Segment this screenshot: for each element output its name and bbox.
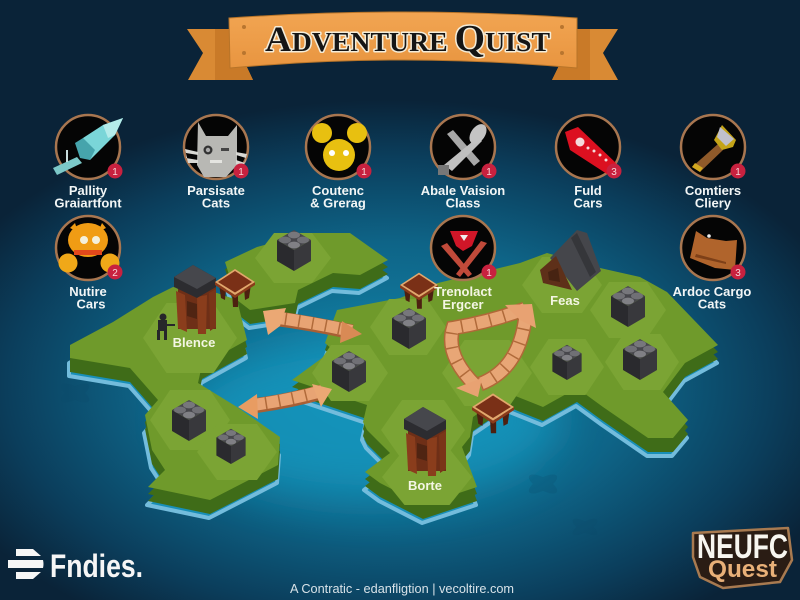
label: Comtiers Cliery: Cliery bbox=[695, 196, 732, 210]
tower: north-west bbox=[174, 265, 216, 334]
label: Parsisate Cats: Parsisate bbox=[187, 183, 245, 198]
label: Nutire Cars: Cars bbox=[77, 296, 105, 312]
hut bbox=[540, 230, 601, 291]
map islands bbox=[69, 233, 718, 523]
icon: crossed tools bbox=[431, 115, 496, 179]
label: Comtiers Cliery: Comtiers bbox=[685, 183, 741, 198]
banner: left tail bbox=[187, 29, 253, 80]
icon: red crossed rockets bbox=[431, 216, 496, 280]
storage cubes bbox=[172, 230, 657, 464]
label: Parsisate Cats: Cats bbox=[202, 196, 230, 210]
footer credit: A Contratic - edanfligtion | vecoltire.com bbox=[290, 582, 514, 596]
corner badge: NEUFC Quest: Quest bbox=[708, 556, 777, 583]
icon: silver mask: 1 bbox=[238, 167, 244, 178]
icon: crystal syringe bbox=[53, 115, 123, 179]
character bbox=[157, 314, 175, 340]
label: Pallity Graiartfont: Graiartfont bbox=[54, 196, 122, 210]
icon: wooden chest bbox=[681, 216, 746, 280]
label: Nutire Cars: Nutire bbox=[69, 284, 107, 299]
map labels bbox=[173, 284, 580, 493]
bridge: looped shield bbox=[451, 304, 536, 397]
footer logo: Fndies bbox=[8, 548, 143, 584]
label: Coutenc & Grerag: Coutenc bbox=[312, 183, 364, 198]
map labels: Ergcer bbox=[442, 297, 484, 312]
icon: silver mask bbox=[184, 115, 248, 179]
label: Abale Vaision Class: Class bbox=[446, 196, 480, 210]
label: Ardoc Cargo Cats: Ardoc Cargo bbox=[673, 284, 751, 299]
label: Fuld Cars: Fuld bbox=[574, 183, 602, 198]
icon: orange creature: 2 bbox=[112, 268, 118, 279]
bridge: upper arrow bbox=[263, 308, 362, 343]
hex pads bbox=[143, 233, 679, 505]
icon: yellow face bbox=[306, 115, 372, 179]
icon: crossed tools: 1 bbox=[486, 167, 492, 178]
title: ADVENTURE QUIST bbox=[265, 18, 550, 60]
icon: orange creature bbox=[56, 216, 122, 280]
map labels: Borte bbox=[408, 478, 442, 493]
label: Abale Vaision Class: Abale Vaision bbox=[421, 183, 505, 198]
icon: crystal syringe: 1 bbox=[112, 167, 118, 178]
map labels: Trenolact bbox=[434, 284, 493, 299]
map labels: Blence bbox=[173, 335, 215, 350]
label: Coutenc & Grerag: & Grerag bbox=[310, 196, 366, 210]
label: Ardoc Cargo Cats: Cats bbox=[698, 296, 726, 312]
icon: hammer torch bbox=[681, 115, 746, 179]
table: south bbox=[472, 393, 514, 433]
banner: main board bbox=[229, 12, 577, 68]
table: west bbox=[215, 269, 255, 307]
icon: hammer torch: 1 bbox=[735, 167, 741, 178]
corner badge: NEUFC Quest bbox=[693, 528, 792, 588]
icon: red tag bbox=[556, 115, 622, 179]
faint water marks bbox=[58, 380, 600, 538]
banner bbox=[187, 12, 618, 80]
water glow bbox=[180, 340, 560, 500]
label: Pallity Graiartfont: Pallity bbox=[69, 183, 107, 198]
icon: wooden chest: 3 bbox=[735, 268, 741, 279]
banner: right tail bbox=[552, 29, 618, 80]
icon: yellow face: 1 bbox=[361, 167, 367, 178]
icon: red tag: 3 bbox=[611, 167, 617, 178]
tower: south bbox=[404, 407, 446, 476]
map labels: Feas bbox=[550, 293, 580, 308]
table: centre bbox=[400, 273, 438, 309]
footer logo: Fndies: Fndies. bbox=[50, 548, 143, 584]
label: Fuld Cars: Cars bbox=[574, 196, 602, 210]
icon: red crossed rockets: 1 bbox=[486, 268, 492, 279]
bridge: lower arrow bbox=[238, 384, 332, 419]
